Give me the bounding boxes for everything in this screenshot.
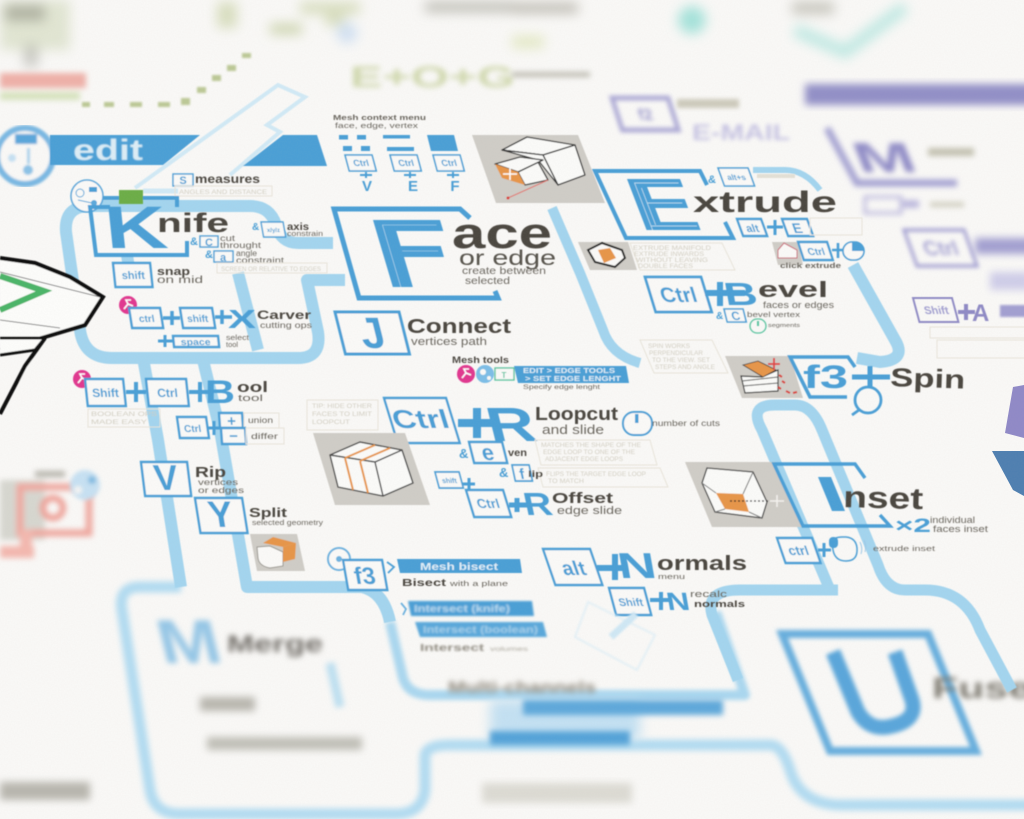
Bisect caption: Bisect xyxy=(402,578,447,589)
letter E xyxy=(627,179,701,230)
angle constraint: angle xyxy=(236,249,258,258)
extrude manifold note: EXTRUDE MANIFOLD xyxy=(633,246,712,252)
differ key xyxy=(221,428,284,445)
snapping note xyxy=(217,263,327,273)
edge mode xyxy=(383,135,421,195)
spin note: PERPENDICULAR xyxy=(649,351,704,357)
mesh bisect band: Mesh bisect xyxy=(420,562,499,573)
menu caption: menu xyxy=(658,574,685,581)
blue icon xyxy=(476,365,494,383)
pink running icon xyxy=(119,296,137,314)
sculpture tool icon at left edge xyxy=(0,258,103,414)
intersect boolean band: Intersect (boolean) xyxy=(423,625,538,636)
Bevel block xyxy=(645,276,835,333)
edit label: edit xyxy=(73,134,143,167)
tip note: FACES TO LIMIT xyxy=(312,412,372,418)
intersect caption: volumes xyxy=(490,647,528,653)
Ctrl key xyxy=(384,398,460,443)
extrude manifold illustration xyxy=(578,242,637,270)
cut throught: throught xyxy=(220,241,262,250)
purple M key: M xyxy=(845,135,924,182)
chevron xyxy=(387,562,394,573)
segments wheel: segments xyxy=(768,323,800,329)
boolean note: BOOLEAN OPS xyxy=(91,412,157,418)
alt plus E xyxy=(737,218,862,237)
angle constraint: a xyxy=(220,252,227,264)
blurred purple section xyxy=(612,84,1024,496)
Bisect block xyxy=(328,548,522,615)
pink icon xyxy=(457,365,475,383)
blurred green heading xyxy=(350,61,590,94)
blurred pink bar xyxy=(0,73,86,100)
letter R: R xyxy=(480,399,542,452)
tip note: LOOPCUT xyxy=(312,420,350,426)
intersect knife band: Intersect (knife) xyxy=(414,604,510,615)
click extrude xyxy=(772,242,864,270)
Rip shortcut: V xyxy=(151,457,180,498)
plus connector xyxy=(126,382,146,402)
Rip shortcut: vertices xyxy=(198,478,238,487)
union key: + xyxy=(227,413,237,430)
Bool block xyxy=(73,370,284,445)
bevel vertex: C xyxy=(730,309,742,323)
blue menu band xyxy=(514,366,629,383)
Connect block: J xyxy=(354,310,391,358)
cut throught: C xyxy=(205,237,213,249)
spin illustration xyxy=(725,356,803,398)
plus space xyxy=(158,335,249,349)
ace word: ace xyxy=(452,209,552,258)
knife key box xyxy=(90,198,187,255)
Ctrl key small xyxy=(177,417,209,438)
purple header bar xyxy=(805,84,1024,105)
shift key xyxy=(180,308,215,328)
vertex mode: Ctrl xyxy=(352,158,370,168)
Ctrl key: Ctrl xyxy=(657,283,700,307)
flip note: FLIPS THE TARGET EDGE LOOP xyxy=(546,472,646,478)
even key: e xyxy=(478,440,497,465)
mesh context menu block xyxy=(333,115,464,195)
plus space: tool xyxy=(226,342,238,349)
purple f2 key xyxy=(612,98,678,130)
flip note xyxy=(538,468,668,487)
shift key: shift xyxy=(441,477,458,485)
alt plus E: alt xyxy=(744,223,761,235)
ool word: ool xyxy=(237,379,268,396)
flip note: TO MATCH xyxy=(548,479,584,485)
shift snap: snap xyxy=(157,266,190,278)
ctrl key xyxy=(777,538,821,563)
Mesh tools block: Mesh tools xyxy=(452,355,509,365)
soft blue block xyxy=(490,700,640,740)
plus connector two xyxy=(650,592,669,610)
cutting ops: cutting ops xyxy=(260,321,312,330)
tip note xyxy=(307,400,378,430)
lower connecting path xyxy=(390,612,745,695)
axis constrain: constrain xyxy=(287,231,323,238)
letter R: R xyxy=(520,486,555,522)
flip key: lip xyxy=(528,469,544,479)
Knife block xyxy=(71,180,327,287)
magnifier icon xyxy=(852,387,881,415)
Offset word: Offset xyxy=(552,490,613,507)
click extrude: Ctrl xyxy=(806,247,827,258)
f3 key box xyxy=(790,357,855,397)
tool word: tool xyxy=(238,393,263,403)
extrude manifold note xyxy=(630,243,735,270)
menu path text xyxy=(523,368,622,383)
blurred gray block xyxy=(482,783,632,803)
evel word: evel xyxy=(758,277,828,302)
create between: create between xyxy=(462,266,546,277)
bottom light paths xyxy=(121,587,1024,814)
menu path text: > SET EDGE LENGHT xyxy=(525,376,622,383)
inset key box xyxy=(774,464,890,526)
shift snap xyxy=(113,263,203,287)
alt key: alt xyxy=(558,558,589,580)
blurred Fuse label: Fuse xyxy=(932,672,1024,705)
plus connector xyxy=(597,554,625,580)
pale lower-left pink key xyxy=(0,471,89,558)
face mode xyxy=(427,135,464,195)
cut throught: & xyxy=(190,236,198,248)
Ctrl key: Ctrl xyxy=(156,386,179,400)
shift key: shift xyxy=(186,314,210,325)
axis constrain xyxy=(252,222,323,238)
differ key: differ xyxy=(251,432,279,441)
edge mode: E xyxy=(408,178,418,195)
Rip shortcut: or edges xyxy=(198,486,244,495)
extrude manifold note: WITHOUT LEAVING xyxy=(636,258,708,264)
flip key: f xyxy=(518,466,527,483)
bevel vertex: & xyxy=(716,311,723,322)
edit section header xyxy=(0,128,327,184)
measures shortcut xyxy=(173,172,272,196)
blurred bottom section xyxy=(0,470,1024,814)
context menu caption: Mesh context menu xyxy=(333,115,426,122)
letter I xyxy=(818,477,845,511)
vertex mode: V xyxy=(362,178,372,195)
Rip shortcut: Rip xyxy=(195,464,226,481)
knife mode icon xyxy=(71,180,103,212)
plus connector two xyxy=(509,498,528,512)
spin note xyxy=(640,340,728,373)
plus connector xyxy=(462,478,475,489)
U key xyxy=(782,634,976,751)
Ctrl key xyxy=(146,379,189,406)
letter N: N xyxy=(614,545,659,586)
blurred circle icon xyxy=(70,470,100,500)
nset word: nset xyxy=(843,481,924,516)
context menu caption: face, edge, vertex xyxy=(335,123,419,130)
pink running icon xyxy=(73,370,91,388)
context menu caption xyxy=(333,115,426,130)
Carver word: Carver xyxy=(257,308,311,322)
plus connector xyxy=(852,366,890,388)
intersect boolean band xyxy=(415,622,547,637)
along normals key: alt+s xyxy=(726,173,748,182)
selected: selected xyxy=(465,276,510,287)
edit icon circle xyxy=(0,128,53,184)
intersect caption: Intersect xyxy=(420,643,485,654)
along normals key xyxy=(708,168,795,186)
even key: & xyxy=(459,446,468,461)
normals caption: normals xyxy=(694,599,745,609)
alt plus E: E xyxy=(790,221,806,237)
ctrl key: ctrl xyxy=(786,543,811,558)
along normals key: & xyxy=(708,174,716,186)
Connect block: Connect xyxy=(407,316,511,338)
Split shortcut: Split xyxy=(249,505,288,520)
Ctrl key xyxy=(645,277,712,312)
tip note: TIP: HIDE OTHER xyxy=(312,404,373,410)
mesh bisect band xyxy=(397,559,522,573)
bevel vertex xyxy=(716,309,800,323)
Ctrl key: Ctrl xyxy=(475,496,502,511)
measures shortcut: measures xyxy=(195,172,260,186)
angle constraint: constraint xyxy=(236,256,285,265)
faint tool diagram xyxy=(575,602,655,670)
segments wheel xyxy=(750,319,800,333)
even note: MATCHES THE SHAPE OF THE xyxy=(541,443,641,449)
plus connector two xyxy=(215,310,232,324)
Inset block xyxy=(685,462,989,563)
Shift key: Shift xyxy=(617,597,645,609)
and slide: and slide xyxy=(542,422,604,437)
Mesh tools block xyxy=(452,355,629,391)
letter B: B xyxy=(721,276,760,312)
angle constraint xyxy=(205,249,285,265)
number of cuts: number of cuts xyxy=(652,419,720,428)
flip key xyxy=(499,465,544,483)
green T key: T xyxy=(502,371,507,380)
green square xyxy=(119,190,143,204)
Loopcut block xyxy=(307,398,720,505)
differ key: − xyxy=(229,428,239,445)
plus connector two xyxy=(189,382,210,402)
purple f2 key: f2 xyxy=(636,106,656,124)
purple M key xyxy=(827,128,974,213)
Spin block xyxy=(640,340,966,415)
f3 key: f3 xyxy=(352,563,378,590)
extrude inset caption: extrude inset xyxy=(873,544,936,553)
dark blue shape xyxy=(992,451,1024,496)
Bisect caption: with a plane xyxy=(448,581,508,588)
purple Ctrl key xyxy=(904,230,977,266)
Loopcut word: Loopcut xyxy=(535,404,618,424)
Ctrl key: Ctrl xyxy=(388,405,453,434)
axis constrain: x/y/z xyxy=(267,228,281,234)
xtrude word: xtrude xyxy=(693,186,837,219)
Rip shortcut xyxy=(140,457,244,498)
edit band right part xyxy=(243,135,327,166)
purple Shift key and plus A: Shift xyxy=(923,305,951,317)
shift key xyxy=(435,472,463,488)
ctrl key: ctrl xyxy=(138,314,156,325)
Split shortcut: selected geometry xyxy=(252,520,324,527)
letter N two: N xyxy=(664,588,692,616)
even key: ven xyxy=(508,448,527,459)
inset illustration xyxy=(685,462,803,527)
f3 key xyxy=(343,560,387,590)
Carver block xyxy=(119,296,312,349)
purple label blocks xyxy=(677,99,790,145)
main shortcut content xyxy=(71,115,989,616)
vertex mode xyxy=(339,135,376,195)
cut throught: cut xyxy=(220,234,236,243)
plus connector xyxy=(705,282,745,306)
intersect options, slightly out of focus xyxy=(408,601,655,670)
ctrl key xyxy=(129,308,163,328)
ormals word: ormals xyxy=(657,553,747,575)
intersect caption xyxy=(420,643,528,654)
individual caption: individual xyxy=(930,515,975,525)
Extrude block xyxy=(578,168,864,270)
Face or edge block xyxy=(334,209,556,298)
plus space: select xyxy=(226,335,249,342)
letter F xyxy=(373,220,460,287)
specify caption: Specify edge lenght xyxy=(523,384,600,391)
measures shortcut: ANGLES AND DISTANCE xyxy=(179,190,267,196)
extrude manifold note: DOUBLE FACES xyxy=(638,264,693,270)
purple shape xyxy=(1005,385,1024,438)
scroll mouse xyxy=(623,412,652,435)
green T key xyxy=(495,368,514,380)
green dotted line xyxy=(82,53,251,107)
plus connector xyxy=(163,311,180,325)
face mode: Ctrl xyxy=(440,158,458,168)
bevel vertex: bevel vertex xyxy=(747,310,800,319)
Connect block xyxy=(334,310,511,358)
Bisect caption xyxy=(402,578,508,589)
blurred purple plus shapes xyxy=(975,238,1024,290)
axis constrain: & xyxy=(252,222,259,233)
bisect mode icon xyxy=(328,548,350,570)
even key xyxy=(459,440,527,465)
faces or edges: faces or edges xyxy=(763,300,835,310)
blurred Merge block: M xyxy=(149,608,228,677)
Shift key: Shift xyxy=(91,386,120,400)
or edge: or edge xyxy=(459,247,556,270)
edge mode: Ctrl xyxy=(397,158,415,168)
plus connector xyxy=(818,543,831,557)
Ctrl key xyxy=(466,490,511,517)
blurred green heading: E+O+G xyxy=(350,61,515,94)
plus connector small xyxy=(208,421,220,435)
purple Shift key and plus A: A xyxy=(972,300,989,327)
blurred Merge block: Merge xyxy=(227,631,323,658)
faces inset caption: faces inset xyxy=(933,524,989,534)
face mode: F xyxy=(450,178,460,195)
blurred top section: green, teal and gray shapes xyxy=(0,0,905,107)
extrude illustration xyxy=(472,135,605,203)
extrude manifold note: EXTRUDE INWARDS xyxy=(634,252,704,258)
spin note: SPIN WORKS xyxy=(648,344,690,350)
Connect block: vertices path xyxy=(411,336,487,348)
alt key xyxy=(543,549,602,585)
blurred gray labels xyxy=(0,697,362,800)
measures shortcut: S xyxy=(179,175,187,187)
blurred Merge block xyxy=(149,608,323,677)
purple Shift key and plus A xyxy=(913,298,1024,327)
pale purple notes xyxy=(930,327,1024,358)
extrude key box xyxy=(595,171,733,238)
recalc caption: recalc xyxy=(690,589,728,599)
even note: EDGE LOOP TO ONE OF THE xyxy=(543,450,635,456)
edge slide: edge slide xyxy=(557,505,622,517)
face key box xyxy=(334,209,498,298)
chevron two xyxy=(401,603,406,615)
click extrude: click extrude xyxy=(780,261,841,270)
snapping note: SCREEN OR RELATIVE TO EDGES xyxy=(221,267,321,273)
light blue connection paths xyxy=(66,85,1012,690)
Split shortcut: Y xyxy=(205,493,236,535)
times two: ×2 xyxy=(895,516,931,537)
plus connector xyxy=(458,408,494,438)
boolean note: MADE EASY xyxy=(91,420,147,426)
letter X: X xyxy=(228,304,257,334)
menu path text: EDIT > EDGE TOOLS xyxy=(523,368,615,375)
union key: union xyxy=(248,416,273,425)
Knife word: nife xyxy=(157,208,229,238)
f3 text: f3 xyxy=(803,359,848,395)
intersect knife band xyxy=(408,601,534,616)
spin note: TO THE VIEW. SET xyxy=(652,358,710,364)
purple Ctrl key: Ctrl xyxy=(920,238,962,260)
cut throught xyxy=(190,234,262,250)
purple label blocks: E-MAIL xyxy=(692,120,790,145)
Normals block xyxy=(543,545,747,616)
flip key: & xyxy=(499,465,508,480)
plus space: space xyxy=(180,337,211,347)
spin note: STEPS AND ANGLE xyxy=(655,365,715,371)
Split shortcut xyxy=(194,493,324,571)
edit band xyxy=(50,135,200,165)
drag mouse xyxy=(829,537,866,561)
Ctrl key small: Ctrl xyxy=(183,424,202,435)
boolean note xyxy=(88,409,160,427)
shift snap: on mid xyxy=(157,275,203,286)
Shift key xyxy=(609,588,651,615)
even note xyxy=(535,440,657,465)
loopcut illustration xyxy=(313,433,430,505)
split illustration xyxy=(250,534,305,571)
Shift key xyxy=(85,379,126,406)
angle constraint: & xyxy=(205,249,213,261)
Offset block xyxy=(435,472,622,522)
Spin word: Spin xyxy=(890,362,966,395)
letter B: B xyxy=(205,374,235,410)
union key xyxy=(219,413,279,430)
even note: ADJACENT EDGE LOOPS xyxy=(545,457,623,463)
axis constrain: axis xyxy=(287,222,309,233)
blurred bands xyxy=(448,678,723,745)
letter K: K xyxy=(101,194,170,261)
blurred bands: Multi-channels xyxy=(448,678,596,697)
shift snap: shift xyxy=(121,270,146,282)
